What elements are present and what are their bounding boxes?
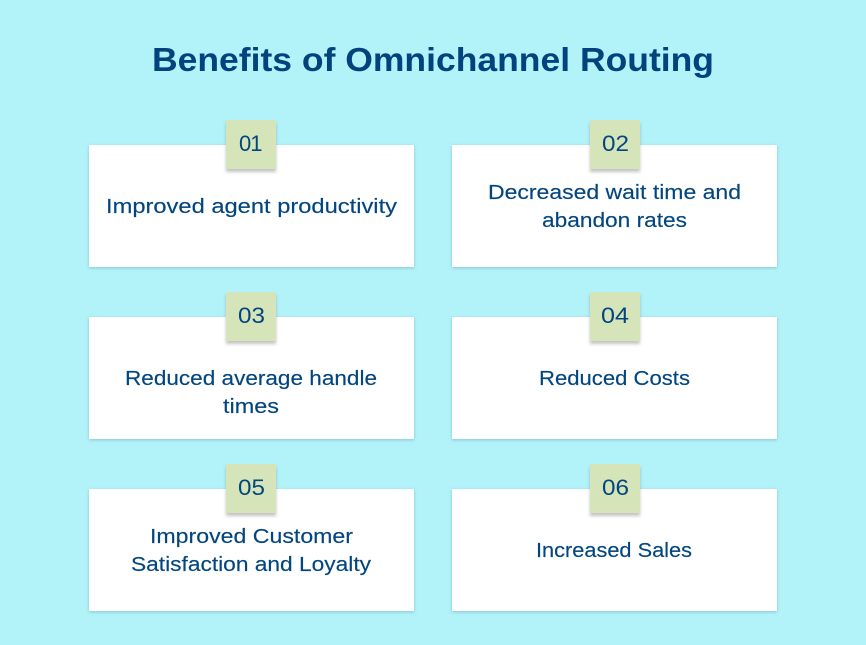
card 04 [452,317,777,439]
badge 03 [226,292,276,341]
card 01 [89,145,414,267]
text 05 [131,525,372,576]
text 02: abandon rates [542,209,687,232]
text 05: Improved Customer [150,525,353,548]
badge 06 [590,464,640,513]
badge 04 [590,292,640,341]
badge 05 [226,464,276,513]
text 03: times [223,395,279,418]
panel: benefit 04 [452,292,777,439]
panel: benefit 06 [452,464,777,611]
panel: benefit 01 [89,120,414,267]
badge 03: 03 [238,303,265,328]
text 03: Reduced average handle [125,367,377,390]
badge 04: 04 [601,303,629,328]
text 02: Decreased wait time and [488,181,741,204]
card 02 [452,145,777,267]
badge 02: 02 [602,131,629,156]
title: Benefits of Omnichannel Routing [152,41,714,78]
card 06 [452,489,777,611]
panel: benefit 03 [89,292,414,439]
panel: benefit 05 [89,464,414,611]
text 04: Reduced Costs [539,367,690,390]
badge 05: 05 [238,475,265,500]
text 01: Improved agent productivity [106,195,398,218]
badge 02 [590,120,640,169]
card 03 [89,317,414,439]
badge 06: 06 [602,475,629,500]
badge 01 [226,120,276,169]
text 05: Satisfaction and Loyalty [131,553,372,576]
card 05 [89,489,414,611]
panel: benefit 02 [452,120,777,267]
badge 01: 01 [239,131,262,156]
text 03 [125,367,377,418]
text 02 [488,181,741,232]
text 06: Increased Sales [536,539,692,562]
